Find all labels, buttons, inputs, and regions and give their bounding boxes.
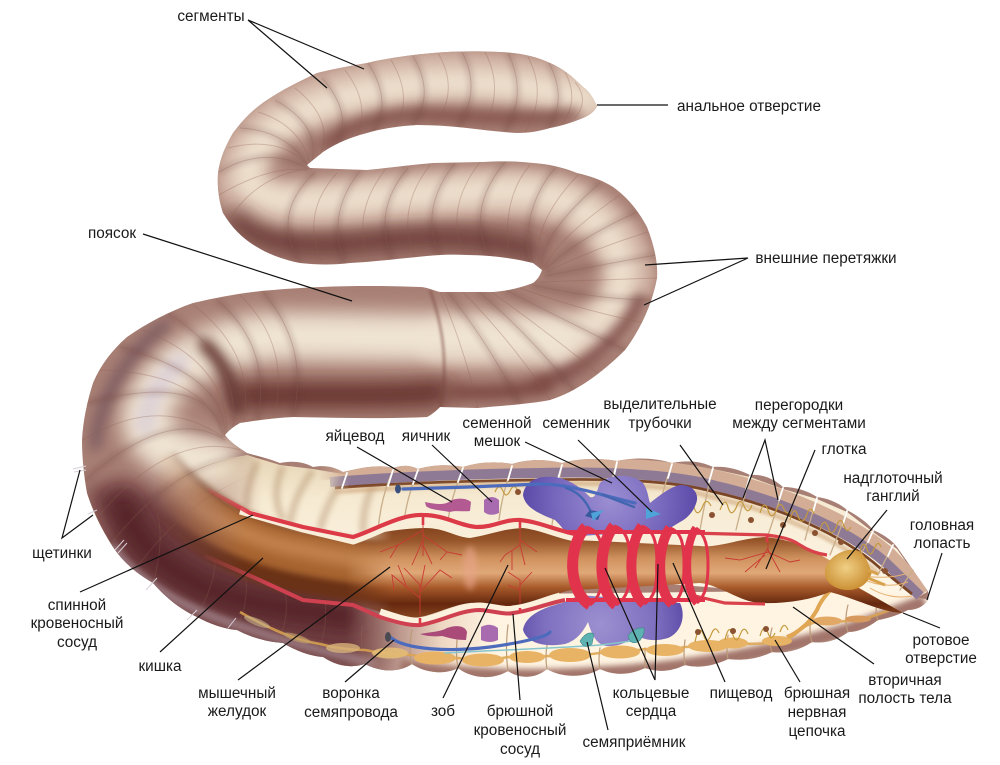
label: глотка: глотка bbox=[821, 441, 867, 458]
leader: щетинки bbox=[62, 470, 93, 538]
leader: глотка bbox=[766, 450, 815, 569]
label: выделительные трубочки: трубочки bbox=[628, 415, 692, 432]
segment ridges bbox=[83, 52, 658, 664]
worm body bbox=[60, 40, 940, 680]
leader: мышечный желудок bbox=[238, 567, 390, 680]
label: семяприёмник: семяприёмник bbox=[582, 734, 686, 751]
label: вторичная полость тела: вторичная bbox=[868, 672, 942, 689]
leader: брюшная нервная цепочка bbox=[775, 640, 800, 682]
testes bbox=[385, 484, 661, 642]
leader: яичник bbox=[432, 445, 492, 502]
label: щетинки: щетинки bbox=[32, 545, 92, 562]
leader: яйцевод bbox=[357, 447, 452, 502]
cream rib shading bbox=[247, 462, 377, 533]
label: кишка: кишка bbox=[138, 658, 182, 675]
label: брюшной кровеносный сосуд: брюшной bbox=[487, 703, 553, 720]
leader: вторичная полость тела bbox=[793, 607, 874, 664]
leader: головная лопасть bbox=[927, 553, 942, 600]
leader: брюшной кровеносный сосуд bbox=[513, 614, 520, 700]
leader: внешние перетяжки bbox=[644, 258, 748, 305]
segment walls bbox=[342, 462, 913, 671]
leader: перегородки между сегментами bbox=[743, 440, 778, 500]
seminal sacs lower bbox=[523, 595, 683, 646]
ovaries and oviduct funnels bbox=[420, 497, 499, 642]
leader: надглоточный ганглий bbox=[847, 510, 887, 559]
supraesophageal ganglion bbox=[825, 550, 885, 590]
nephridia dots bbox=[515, 489, 888, 635]
oviducts and vas deferens bbox=[390, 484, 640, 653]
label: яичник: яичник bbox=[402, 428, 451, 445]
leader: сегменты bbox=[248, 20, 364, 88]
label: надглоточный ганглий: надглоточный bbox=[843, 470, 943, 487]
internal cavity: lower cream and belly wall bbox=[345, 590, 930, 680]
label: брюшная нервная цепочка: нервная bbox=[788, 704, 846, 721]
leader: анальное отверстие bbox=[597, 104, 668, 106]
label: перегородки между сегментами: перегородки bbox=[755, 397, 843, 414]
label: брюшная нервная цепочка: цепочка bbox=[788, 723, 846, 740]
capillaries bbox=[380, 517, 800, 615]
label: ротовое отверстие: ротовое bbox=[912, 632, 970, 649]
label: брюшной кровеносный сосуд: кровеносный bbox=[474, 722, 566, 739]
label: мышечный желудок: мышечный bbox=[198, 685, 276, 702]
gut tail section bbox=[150, 466, 395, 572]
label: головная лопасть: головная bbox=[910, 517, 974, 534]
label: спинной кровеносный сосуд: сосуд bbox=[57, 634, 97, 651]
label: перегородки между сегментами: между сегментами bbox=[732, 415, 866, 432]
leader: ротовое отверстие bbox=[903, 613, 940, 628]
ventral blood vessel bbox=[205, 556, 765, 625]
excretory tubules bbox=[495, 486, 912, 642]
leader: зоб bbox=[443, 565, 508, 698]
label: внешние перетяжки: внешние перетяжки bbox=[755, 250, 897, 267]
label: ротовое отверстие: отверстие bbox=[905, 650, 977, 667]
label: пищевод: пищевод bbox=[710, 685, 772, 702]
label: надглоточный ганглий: ганглий bbox=[866, 488, 920, 505]
gut main section bbox=[330, 528, 903, 618]
label: воронка семяпровода: воронка bbox=[322, 685, 380, 702]
leader: спинной кровеносный сосуд bbox=[80, 515, 253, 592]
leader: поясок bbox=[143, 234, 352, 301]
label: вторичная полость тела: полость тела bbox=[858, 690, 952, 707]
label: поясок: поясок bbox=[88, 225, 136, 242]
bristles bbox=[73, 466, 236, 628]
label: кольцевые сердца: кольцевые bbox=[613, 685, 689, 702]
internal cavity: upper cream bbox=[180, 455, 927, 605]
label: семенной мешок: мешок bbox=[474, 433, 521, 450]
label: семенной мешок: семенной bbox=[462, 415, 532, 432]
label: кольцевые сердца: сердца bbox=[626, 703, 677, 720]
ring hearts bbox=[566, 526, 708, 605]
label: выделительные трубочки: выделительные bbox=[603, 396, 717, 413]
label: анальное отверстие: анальное отверстие bbox=[677, 98, 821, 115]
lower left dark skin bbox=[85, 480, 430, 680]
label: мышечный желудок: желудок bbox=[208, 703, 267, 720]
label: сегменты: сегменты bbox=[177, 8, 245, 25]
leader: кольцевые сердца bbox=[605, 564, 658, 680]
leader: семенник bbox=[578, 440, 652, 512]
label: воронка семяпровода: семяпровода bbox=[304, 704, 398, 721]
lit top surface bbox=[239, 73, 632, 342]
label: семенник: семенник bbox=[542, 415, 610, 432]
seminal receptacles bbox=[580, 628, 644, 646]
leader: семенной мешок bbox=[525, 442, 612, 483]
dark under-shading bbox=[95, 114, 640, 445]
label: зоб: зоб bbox=[431, 703, 455, 720]
label: спинной кровеносный сосуд: кровеносный bbox=[31, 615, 123, 632]
ventral nerve chain bbox=[240, 583, 895, 666]
seminal sacs upper bbox=[523, 476, 697, 537]
gut septum highlight bbox=[463, 546, 477, 590]
label: головная лопасть: лопасть bbox=[913, 535, 971, 552]
leader: кишка bbox=[160, 558, 263, 652]
leader: воронка семяпровода bbox=[345, 640, 394, 682]
label: спинной кровеносный сосуд: спинной bbox=[48, 597, 106, 614]
leader: выделительные трубочки bbox=[680, 445, 723, 505]
label: брюшной кровеносный сосуд: сосуд bbox=[500, 741, 540, 758]
external skin silhouette and shading bbox=[60, 40, 940, 680]
label: брюшная нервная цепочка: брюшная bbox=[784, 685, 850, 702]
label: яйцевод: яйцевод bbox=[326, 428, 385, 445]
leader: пищевод bbox=[673, 563, 725, 682]
leader: семяприёмник bbox=[587, 642, 608, 730]
top wall band with purple muscle layer bbox=[300, 465, 925, 596]
dorsal blood vessel bbox=[208, 490, 827, 555]
